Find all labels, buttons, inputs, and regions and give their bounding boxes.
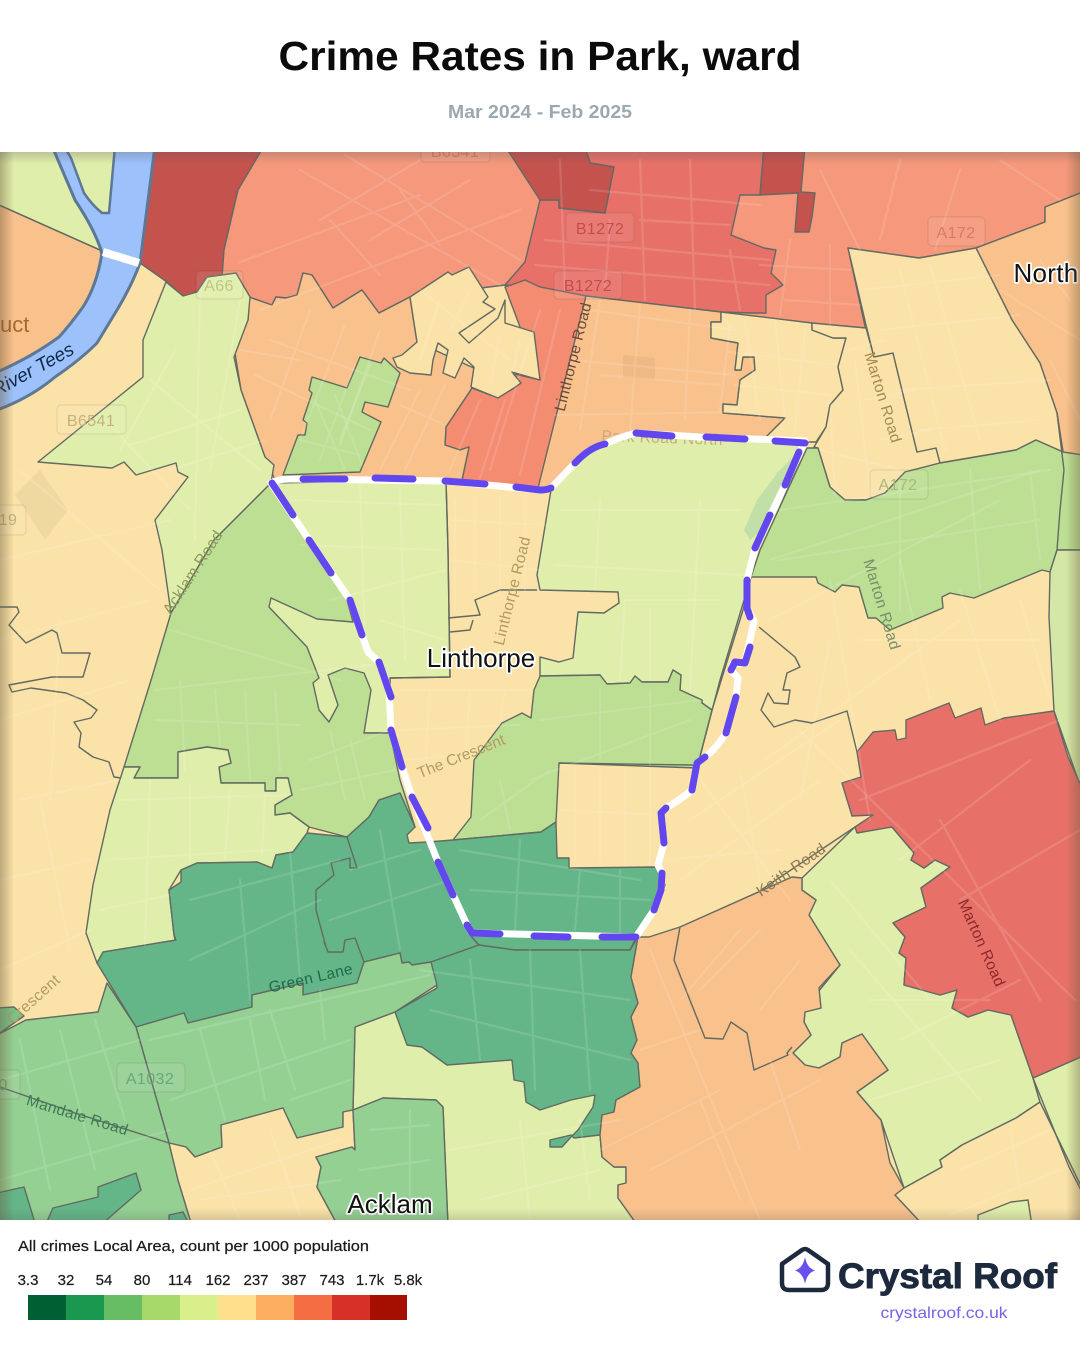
area: dark green patch south-west C — [168, 1211, 188, 1220]
area: medium green west — [0, 983, 192, 1226]
title: Crime Rates in Park, ward — [278, 33, 802, 79]
ward boundary: Park — [271, 433, 805, 937]
area polygons — [0, 146, 1080, 1226]
place: North: North — [1013, 258, 1079, 288]
area: orange south-east — [600, 877, 924, 1226]
area: dark red small block — [760, 146, 815, 232]
map base: cream areas — [0, 264, 1072, 1181]
area: cream north-east — [848, 248, 1063, 463]
area: lime central park — [537, 432, 807, 710]
river island — [64, 146, 115, 213]
area: cream Marton Road — [812, 323, 940, 500]
street: Acklam Road: Acklam Road — [160, 527, 227, 618]
label A66: A66 — [204, 278, 234, 295]
legend values: 114 — [168, 1272, 192, 1289]
street: Linthorpe Road south: Linthorpe Road — [491, 535, 534, 647]
ward outline white — [271, 433, 805, 937]
label B6541 west — [57, 405, 126, 434]
area: cream terraces, north — [711, 312, 846, 442]
area: lime far east — [1033, 1056, 1080, 1190]
area: red Marton Road — [842, 703, 1080, 1078]
area: cream far south-east — [895, 1102, 1080, 1226]
street: Crescent: Crescent — [4, 971, 64, 1028]
legend values: 387 — [281, 1272, 307, 1289]
street: Park Road North: Park Road North — [601, 428, 723, 449]
park pond — [744, 455, 795, 540]
label A172 north — [928, 217, 985, 246]
label A172 mid: A172 — [879, 477, 917, 494]
area: medium green centre — [136, 953, 437, 1157]
area: dark green patch south-west A — [0, 1186, 35, 1220]
place names — [0, 258, 1079, 1219]
area: dark red north block — [505, 146, 614, 213]
area: green below park — [453, 670, 712, 840]
area: orange north-east — [976, 192, 1080, 470]
area: dark red city centre west — [140, 146, 265, 296]
label A172 north: A172 — [937, 225, 975, 242]
legend values: 80 — [134, 1272, 150, 1289]
website: crystalroof.co.uk — [880, 1305, 1009, 1322]
area: green east — [751, 440, 1080, 630]
legend values: 32 — [58, 1272, 74, 1289]
label B6541 top — [421, 140, 490, 162]
label A66 — [196, 271, 243, 299]
area: medium green Acklam — [316, 1098, 448, 1226]
area: lime south-east — [793, 827, 1040, 1188]
tan building blocks — [15, 355, 655, 540]
label A1032 — [117, 1063, 185, 1092]
label 19 — [0, 505, 26, 535]
label B1272 upper: B1272 — [576, 221, 624, 238]
label 0 — [0, 1070, 20, 1099]
legend values: 54 — [96, 1272, 112, 1289]
logo: Crystal Roof — [782, 1249, 1057, 1322]
area: salmon west of Linthorpe Road — [445, 280, 586, 490]
area: lime east strip — [1049, 550, 1080, 794]
label A172 mid — [870, 470, 928, 499]
legend colour scale — [28, 1295, 407, 1320]
legend values: 237 — [243, 1272, 269, 1289]
street: Keith Road: Keith Road — [753, 840, 829, 900]
legend values: 3.3 — [18, 1272, 38, 1289]
area: lime patch south-east — [978, 1200, 1032, 1226]
area: green pocket — [283, 357, 400, 475]
area: green Acklam Road — [124, 483, 415, 837]
area: cream blob — [393, 267, 540, 398]
street: Green Lane: Green Lane — [267, 961, 355, 997]
area: dark green south — [395, 937, 640, 1147]
label B1272 upper — [566, 213, 634, 242]
area: north-west lime — [0, 146, 102, 250]
area: dark green north of Green Lane — [97, 793, 479, 1027]
label B6541 west: B6541 — [67, 413, 115, 430]
bridge — [103, 252, 139, 263]
legend — [18, 1238, 423, 1320]
label A1032: A1032 — [126, 1071, 174, 1088]
boundary lines between cream areas — [0, 204, 1080, 1194]
street: Marton Road north: Marton Road — [860, 350, 904, 445]
place: Acklam: Acklam — [347, 1189, 433, 1219]
area: lime west — [38, 273, 274, 613]
street network — [0, 155, 1080, 1220]
label B1272 lower — [554, 271, 622, 299]
area: lime south central — [353, 1012, 640, 1226]
icon: house with star — [782, 1249, 828, 1290]
area: orange west — [234, 272, 474, 479]
label B1272 lower: B1272 — [564, 278, 612, 295]
river Tees — [0, 146, 155, 410]
subtitle: date range: Mar 2024 - Feb 2025 — [448, 102, 632, 122]
place: Linthorpe: Linthorpe — [427, 643, 535, 673]
label B6541 top: B6541 — [431, 144, 479, 161]
legend title: All crimes Local Area, count per 1000 population — [18, 1238, 369, 1255]
street: Mandale Road: Mandale Road — [24, 1092, 130, 1139]
area: red B1272 block — [505, 146, 783, 313]
area: lime ward north-west — [260, 480, 450, 733]
place: uct: uct — [0, 312, 29, 337]
area: cream Acklam north — [169, 1108, 355, 1226]
wordmark: Crystal Roof — [838, 1257, 1057, 1296]
area: dark green ward south — [428, 822, 665, 950]
legend values — [18, 1272, 423, 1289]
area: dark green small west — [0, 1007, 24, 1035]
street names — [0, 301, 1008, 1139]
area: orange north of park — [538, 296, 785, 490]
area: lime south-west — [86, 747, 309, 963]
map edge shading — [0, 152, 1080, 1220]
area: large salmon north — [222, 146, 1080, 331]
ward outline purple dashes — [272, 433, 805, 937]
street: Marton Road central: Marton Road — [859, 557, 903, 652]
street: The Crescent: The Crescent — [415, 731, 508, 782]
legend values: 162 — [205, 1272, 231, 1289]
area: dark green patch south-west B — [47, 1172, 142, 1220]
area: west of river, orange — [0, 206, 100, 369]
legend values: 743 — [319, 1272, 345, 1289]
road number labels — [0, 140, 985, 1099]
street: Marton Road south: Marton Road — [954, 897, 1008, 990]
legend values: 1.7k — [356, 1272, 385, 1289]
street: Linthorpe Road north: Linthorpe Road — [552, 301, 595, 413]
legend values: 5.8k — [394, 1272, 423, 1289]
